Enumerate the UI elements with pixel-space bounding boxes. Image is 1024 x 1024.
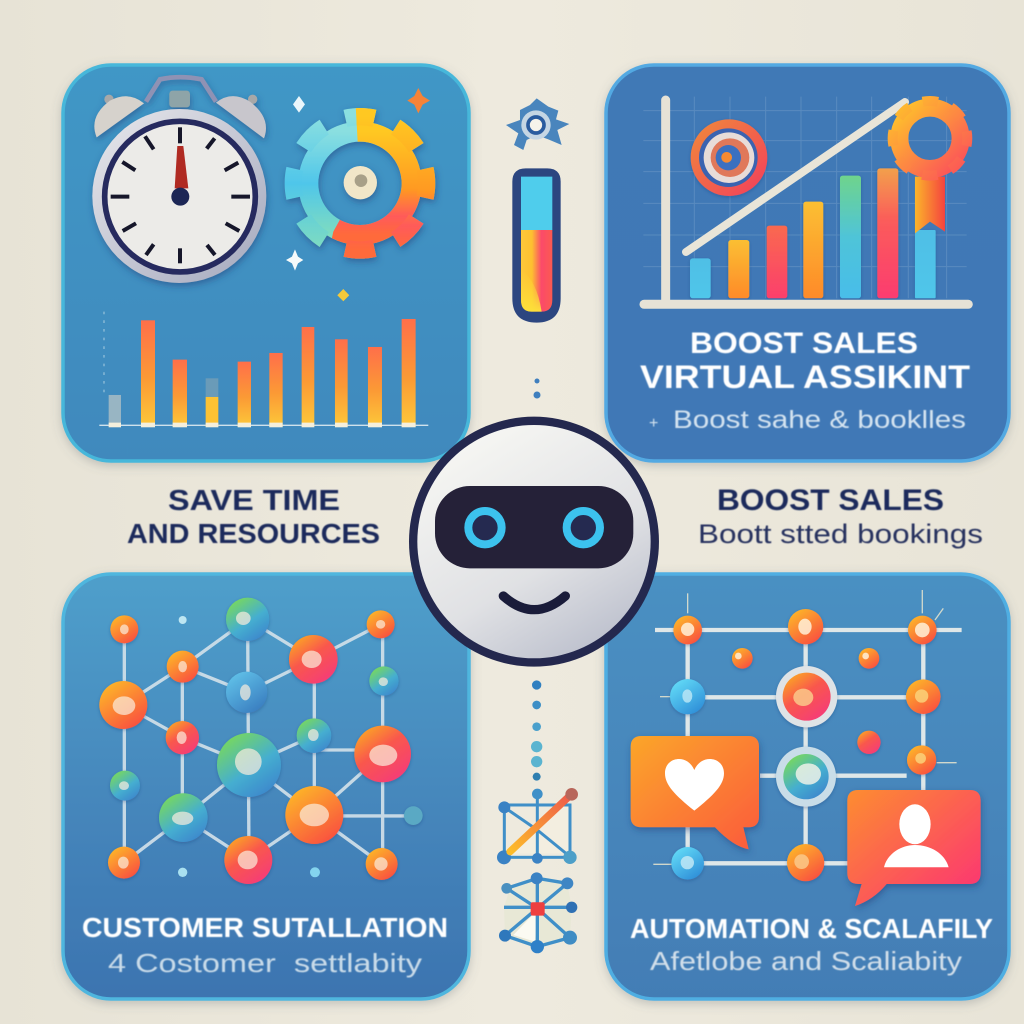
- robot eyes: [468, 511, 600, 544]
- heading: automation and scalability: AUTOMATION & SCALAFILY: [630, 913, 993, 944]
- label: save time and resources: AND RESOURCES: [127, 518, 380, 549]
- icon: sparkles: [286, 88, 430, 301]
- panel: automation and scalability: [606, 574, 1009, 999]
- connector dots: bottom: [531, 680, 542, 781]
- panel: customer satisfaction: [63, 574, 469, 999]
- subtitle: customer satisfaction: 4 Costomer settlabity: [108, 948, 422, 978]
- chart grid: [643, 97, 967, 298]
- icon: gear badge with ribbon: [893, 101, 967, 233]
- robot smile: [503, 596, 565, 610]
- icon: alarm clock: [92, 77, 266, 283]
- network diagram: automation grid: [653, 590, 962, 881]
- panel: boost sales virtual assistant: [606, 65, 1009, 461]
- robot visor: [435, 486, 633, 568]
- heading: customer satisfaction: CUSTOMER SUTALLATION: [82, 912, 448, 943]
- trend line: [686, 102, 905, 252]
- label: save time and resources: SAVE TIME: [168, 485, 340, 517]
- panel: save time and resources: [63, 65, 469, 461]
- subtitle: boost sales and bookings: +: [649, 415, 658, 432]
- chart axes: [644, 100, 968, 304]
- label: save time and resources: [127, 485, 380, 549]
- icon: chat bubble with person: [847, 790, 981, 906]
- label: boost sales: BOOST SALES: [717, 484, 944, 517]
- heading: boost sales virtual assistant: BOOST SALES: [690, 327, 918, 360]
- subtitle: boost sales and bookings: Boost sahe & booklles: [673, 406, 966, 434]
- connector dots: top: [534, 378, 540, 398]
- bar chart: rising orange bars: [99, 312, 428, 427]
- icon: network with orange arrow: [497, 788, 578, 864]
- heading: boost sales virtual assistant: VIRTUAL ASSIKINT: [640, 359, 971, 395]
- icon: colour tube gauge: [512, 168, 561, 323]
- icon: small blue cog: [506, 98, 569, 150]
- icon: target: [691, 119, 767, 196]
- bar chart: colourful sales bars: [690, 168, 936, 298]
- subtitle: automation and scalability: Afetlobe and Scaliabity: [650, 946, 962, 976]
- heading: boost sales virtual assistant: [640, 327, 971, 395]
- icon: chat bubble with heart: [631, 736, 759, 849]
- network diagram: customer nodes: [99, 598, 423, 884]
- icon: gear: [293, 117, 427, 250]
- robot mascot: [409, 417, 659, 667]
- icon: hub network: [499, 872, 577, 953]
- label: boost sales and bookings: Boott stted bookings: [698, 519, 983, 549]
